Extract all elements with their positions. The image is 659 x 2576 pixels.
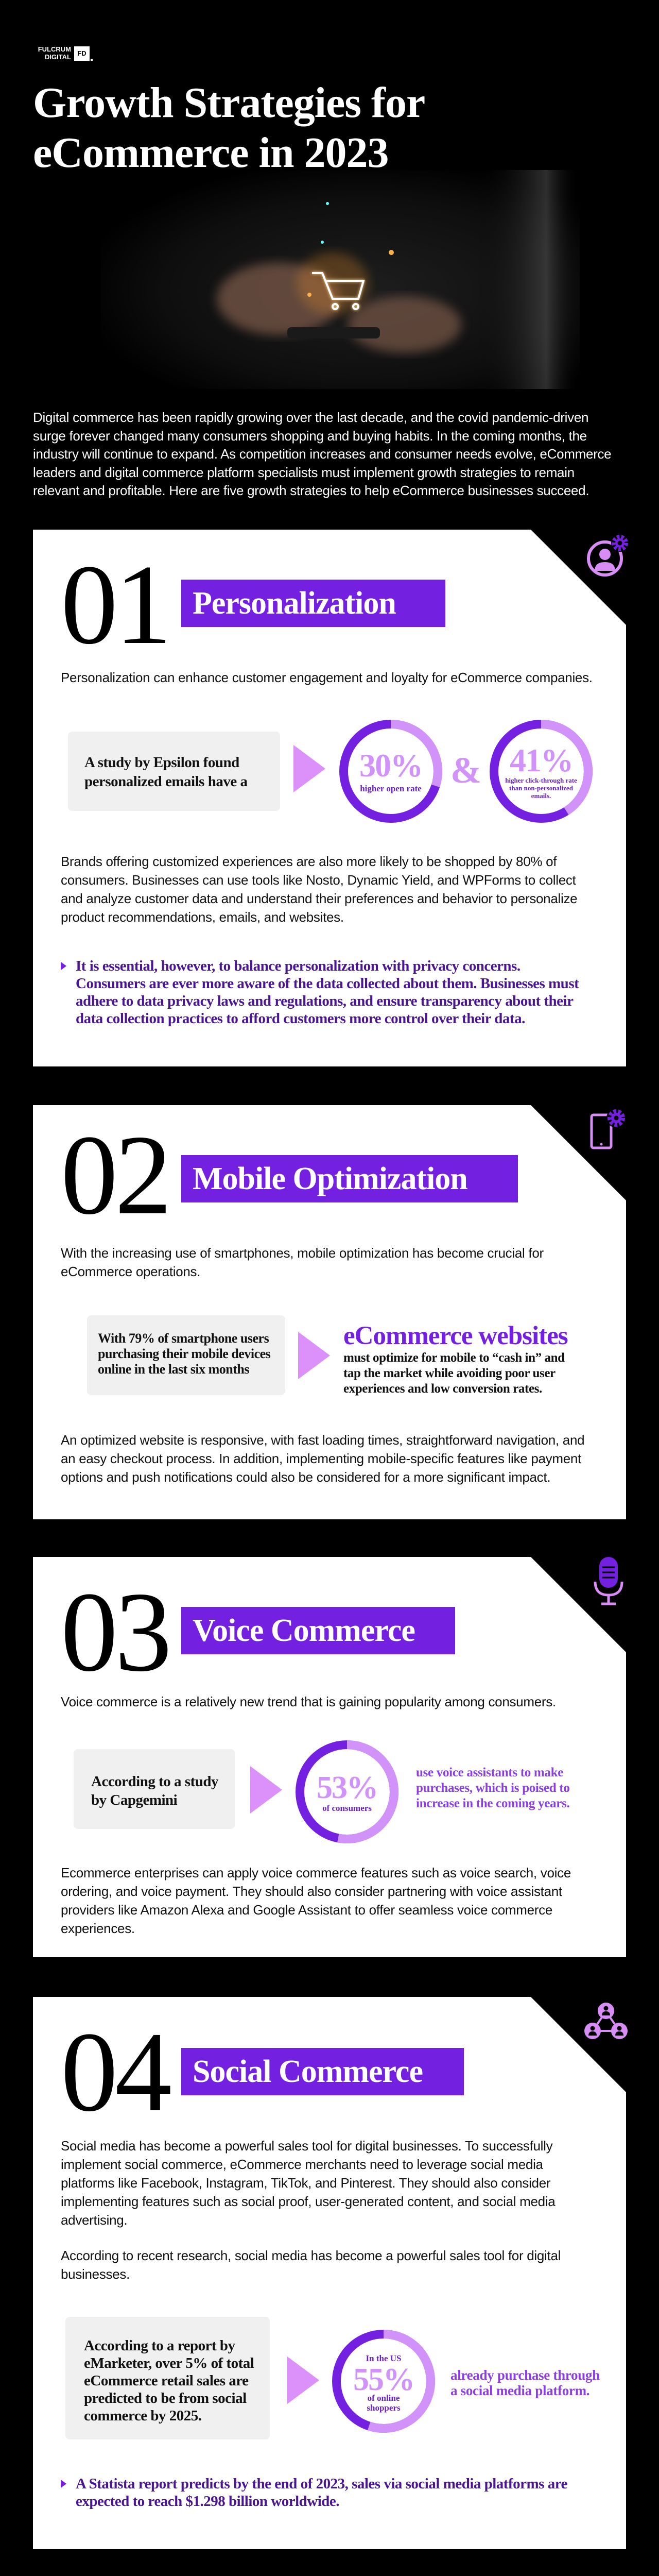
chart: 30% ring: higher open rate (360, 784, 422, 793)
chart: 41% ring: than non-personalized (509, 784, 574, 792)
text: research: According to recent research, social media has become a powerful sales tool for digital (61, 2248, 561, 2263)
text: purchasing their mobile devices (98, 1346, 270, 1361)
chart: 55% ring: In the US (366, 2353, 401, 2363)
text: brands: Brands offering customized experiences are also more likely to be shopped by 80% of (61, 854, 557, 869)
text: ecommerce enterprises: providers like Amazon Alexa and Google Assistant to offer seamless voice commerce (61, 1902, 552, 1918)
callout: privacy bullet: data collection practices to afford customers more control over their data. (76, 1010, 525, 1027)
number 03: 03 (61, 1569, 169, 1696)
chart: 41% ring (490, 720, 593, 823)
title (33, 79, 425, 177)
icon: social network (584, 2003, 628, 2039)
text: brands: and analyze customer data and understand their preferences and behavior to personalize (61, 891, 577, 906)
text: eMarketer, over 5% of total (84, 2355, 254, 2371)
text: According to a study (91, 1773, 218, 1790)
hero image: hands with phone and cart (127, 170, 580, 389)
text: optimized website: an easy checkout process. In addition, implementing mobile-specific features like payment (61, 1451, 581, 1466)
intro text: Digital commerce has been rapidly growing over the last decade, and the covid pandemic-driven (33, 410, 588, 425)
chart: 30% ring: 30% (359, 747, 422, 784)
text: brands: consumers. Businesses can use tools like Nosto, Dynamic Yield, and WPForms to collect (61, 872, 576, 888)
text: A study by Epsilon found (84, 754, 239, 771)
panel: 04 social commerce (33, 1997, 626, 2549)
icon: personalization (587, 535, 628, 577)
number 02: 02 (61, 1112, 169, 1239)
chart: 55% ring: 55% (353, 2362, 414, 2397)
callout: Epsilon study (68, 732, 280, 811)
chart: 41% ring: emails. (531, 792, 551, 800)
callout: 79% users (87, 1315, 285, 1395)
text: voice assistants: purchases, which is poised to (416, 1781, 570, 1795)
panel: 01 personalization (33, 530, 626, 1066)
callout: privacy bullet (61, 958, 579, 1027)
text: intro: eCommerce operations. (61, 1264, 200, 1279)
chart: 30% ring (339, 720, 442, 823)
logo: FULCRUM (38, 45, 71, 53)
logo: FD (77, 49, 86, 57)
chart: 53% ring: 53% (317, 1770, 377, 1805)
text: voice assistants (416, 1766, 570, 1810)
text: already purchase: a social media platform. (450, 2383, 589, 2398)
text: ecommerce enterprises (61, 1865, 571, 1936)
title: eCommerce in 2023 (33, 129, 389, 177)
text: commerce by 2025. (84, 2408, 202, 2424)
arrow (293, 745, 325, 792)
text: online in the last six months (98, 1362, 249, 1377)
number 04: 04 (61, 2009, 169, 2136)
text: intro (61, 1245, 544, 1279)
callout: privacy bullet: It is essential, however, to balance personalization with privacy concerns. (76, 958, 521, 974)
ampersand: & (450, 750, 481, 791)
text: voice assistants: increase in the coming years. (416, 1797, 569, 1810)
chart: 55% ring: shoppers (367, 2403, 401, 2413)
text: social media (61, 2138, 556, 2228)
text: intro: With the increasing use of smartphones, mobile optimization has become crucial for (61, 1245, 544, 1261)
icon: microphone (594, 1557, 623, 1605)
chart: 53% ring (296, 1740, 398, 1843)
text: brands: product recommendations, emails, and websites. (61, 909, 344, 925)
text: According to a report by (84, 2337, 235, 2354)
heading: Mobile Optimization (181, 1155, 518, 1202)
text: intro: Personalization can enhance customer engagement and loyalty for eCommerce companies. (61, 670, 593, 685)
text: already purchase (450, 2367, 600, 2398)
intro text: surge forever changed many consumers shopping and buying habits. In the coming months, the (33, 428, 587, 443)
chart: 55% ring (332, 2330, 435, 2433)
text: brands (61, 854, 577, 925)
callout: eMarketer (65, 2317, 270, 2439)
arrow (298, 1332, 330, 1379)
text: research (61, 2248, 561, 2282)
text: by Capgemini (91, 1792, 177, 1808)
text: social media: advertising. (61, 2212, 127, 2228)
text: personalized emails have a (84, 773, 247, 790)
text: ecommerce enterprises: Ecommerce enterprises can apply voice commerce features such as voice search, voice (61, 1865, 571, 1880)
heading: Mobile Optimization: Mobile Optimization (193, 1161, 467, 1196)
callout: privacy bullet: Consumers are ever more aware of the data collected about them. Businesses must (76, 975, 579, 992)
text: ecommerce enterprises: ordering, and voice payment. They should also consider partnering with voice assistant (61, 1884, 562, 1899)
text: research: businesses. (61, 2266, 130, 2282)
callout: privacy bullet: adhere to data privacy laws and regulations, and ensure transparency about their (76, 993, 573, 1009)
arrow (287, 2357, 319, 2404)
text: eCommerce websites: tap the market while avoiding poor user (343, 1366, 556, 1380)
chart: 53% ring: of consumers (322, 1803, 372, 1813)
heading: Social Commerce (181, 2048, 464, 2095)
callout: Statista bullet: A Statista report predicts by the end of 2023, sales via social media platforms are (76, 2476, 567, 2492)
text: With 79% of smartphone users (98, 1331, 269, 1346)
text: eCommerce websites: eCommerce websites (343, 1321, 568, 1350)
icon: mobile with gear (590, 1109, 625, 1149)
text: social media: implement social commerce, eCommerce merchants need to leverage social media (61, 2157, 543, 2172)
text: predicted to be from social (84, 2390, 247, 2406)
intro text: industry will continue to expand. As competition increases and consumer needs evolve, eCommerce (33, 446, 611, 462)
text: ecommerce enterprises: experiences. (61, 1921, 135, 1936)
intro text: relevant and profitable. Here are five growth strategies to help eCommerce businesses succeed. (33, 483, 589, 498)
text: social media: implementing features such as social proof, user-generated content, and social media (61, 2194, 555, 2209)
text: eCommerce websites (343, 1321, 568, 1396)
chart: 55% ring: of online (368, 2393, 400, 2403)
text: social media: platforms like Facebook, Instagram, TikTok, and Pinterest. They should also consider (61, 2175, 550, 2191)
text: optimized website: An optimized website is responsive, with fast loading times, straightforward navigation, and (61, 1432, 584, 1448)
callout: Statista bullet: expected to reach $1.298 billion worldwide. (76, 2493, 339, 2510)
heading: Social Commerce: Social Commerce (193, 2054, 423, 2089)
callout: Statista bullet (61, 2476, 567, 2510)
number 01: 01 (61, 541, 169, 668)
heading: Personalization (181, 580, 445, 627)
text: eCommerce websites: must optimize for mobile to “cash in” and (343, 1351, 565, 1365)
text: intro: Voice commerce is a relatively new trend that is gaining popularity among consumers. (61, 1694, 556, 1709)
chart: 41% ring: 41% (510, 742, 573, 778)
heading: Voice Commerce (181, 1607, 455, 1654)
panel: 02 mobile optimization (33, 1105, 626, 1519)
text: voice assistants: use voice assistants to make (416, 1766, 563, 1780)
text: optimized website: options and push notifications could also be considered for a more significant impact. (61, 1469, 550, 1485)
panel: 03 voice commerce (33, 1557, 626, 1957)
text: eCommerce retail sales are (84, 2372, 249, 2389)
logo: DIGITAL (45, 53, 71, 61)
chart: 41% ring: higher click-through rate (505, 776, 577, 784)
text: already purchase: already purchase through (450, 2367, 600, 2383)
text: social media: Social media has become a powerful sales tool for digital businesses. To successfully (61, 2138, 552, 2154)
text: eCommerce websites: experiences and low conversion rates. (343, 1382, 542, 1396)
heading: Personalization: Personalization (193, 586, 396, 621)
intro text (33, 410, 611, 498)
text: optimized website (61, 1432, 584, 1485)
title: Growth Strategies for (33, 79, 425, 127)
heading: Voice Commerce: Voice Commerce (193, 1613, 415, 1648)
intro text: leaders and digital commerce platform specialists must implement growth strategies to remain (33, 465, 575, 480)
logo (38, 45, 93, 61)
callout: Capgemini (74, 1749, 235, 1829)
arrow (250, 1766, 282, 1814)
